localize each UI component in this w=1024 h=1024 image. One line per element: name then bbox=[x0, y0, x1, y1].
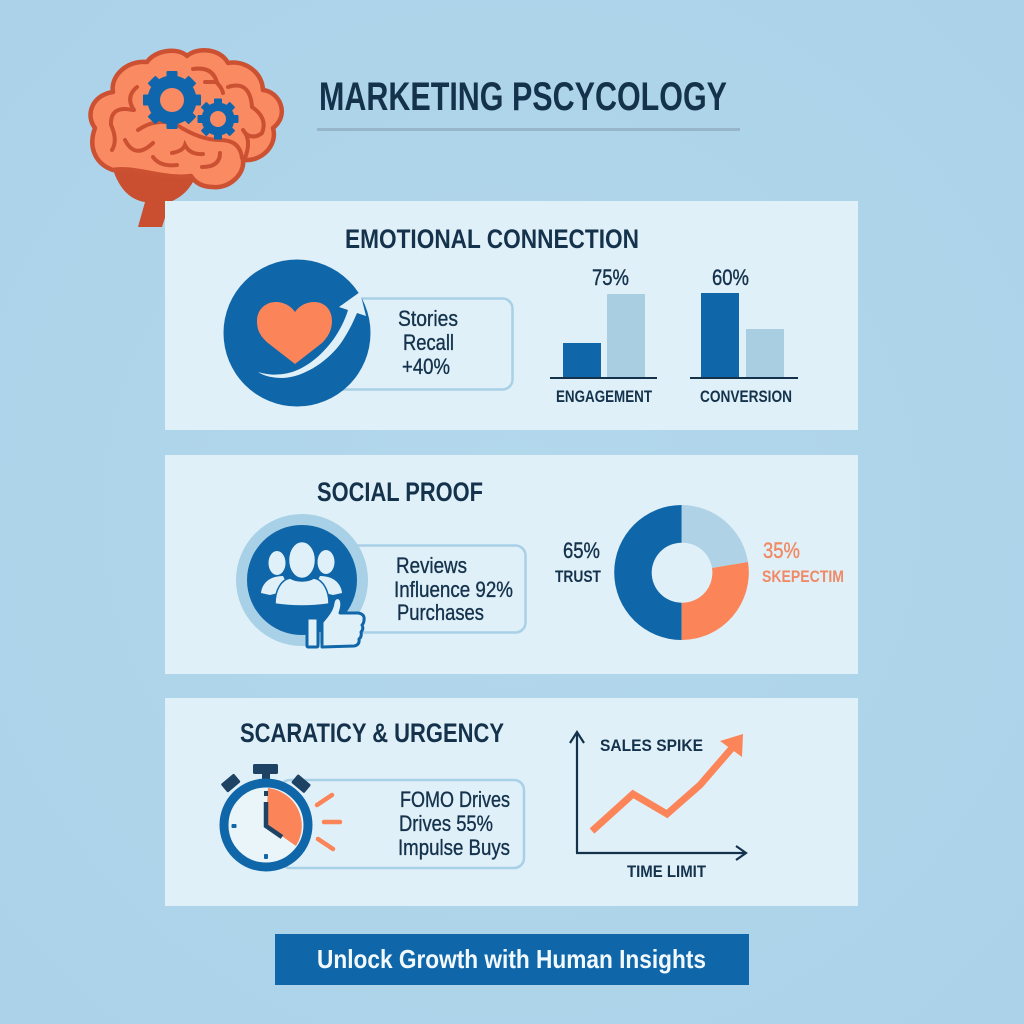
callout: reviews influence: Purchases bbox=[397, 600, 484, 625]
callout: stories recall: Stories bbox=[398, 306, 458, 331]
icon: brain with gears bbox=[91, 50, 282, 227]
callout: reviews influence: Influence 92% bbox=[394, 577, 513, 602]
title: MARKETING PSCYCOLOGY bbox=[319, 75, 727, 119]
callout: stories recall: Recall bbox=[403, 330, 454, 355]
panel: social proof bbox=[165, 455, 858, 674]
callout: fomo: Drives 55% bbox=[399, 811, 493, 836]
callout: fomo: Impulse Buys bbox=[398, 835, 510, 860]
icon: small gear bbox=[198, 98, 238, 140]
heading: social proof: SOCIAL PROOF bbox=[317, 477, 483, 507]
label: skepticism: 35% bbox=[763, 538, 800, 563]
title bbox=[317, 75, 740, 131]
bar chart: engagement: 75% bbox=[592, 265, 629, 290]
bar chart: engagement bbox=[550, 265, 657, 406]
line chart: sales spike bbox=[570, 732, 746, 881]
callout: reviews influence bbox=[320, 546, 526, 632]
call to action banner bbox=[275, 934, 749, 985]
heading: scarcity and urgency: SCARATICY & URGENCY bbox=[240, 718, 504, 748]
panel: emotional connection bbox=[165, 201, 858, 430]
line chart: sales spike: SALES SPIKE bbox=[600, 736, 703, 755]
label: trust: TRUST bbox=[555, 567, 601, 586]
icon: heart with rising arrow bbox=[224, 260, 370, 406]
callout: fomo: FOMO Drives bbox=[400, 787, 510, 812]
bar chart: conversion: 60% bbox=[712, 265, 749, 290]
bar chart: conversion: CONVERSION bbox=[700, 387, 792, 406]
callout: stories recall bbox=[300, 298, 512, 390]
icon: large gear bbox=[143, 71, 201, 129]
bar chart: engagement: ENGAGEMENT bbox=[556, 387, 652, 406]
icon: stopwatch bbox=[221, 764, 340, 867]
callout: reviews influence: Reviews bbox=[396, 553, 467, 578]
label: skepticism: SKEPECTIM bbox=[762, 567, 844, 586]
icon: people with thumbs up bbox=[236, 514, 368, 647]
donut chart: trust vs skepticism bbox=[614, 505, 749, 640]
panel: scarcity and urgency bbox=[165, 698, 858, 906]
label: trust bbox=[555, 538, 601, 586]
label: skepticism bbox=[762, 538, 844, 586]
label: trust: 65% bbox=[563, 538, 600, 563]
heading: emotional connection: EMOTIONAL CONNECTION bbox=[345, 224, 639, 254]
callout: fomo bbox=[280, 780, 524, 868]
callout: stories recall: +40% bbox=[402, 354, 450, 379]
bar chart: conversion bbox=[690, 265, 798, 406]
line chart: sales spike: TIME LIMIT bbox=[627, 862, 707, 881]
call to action banner: Unlock Growth with Human Insights bbox=[317, 944, 706, 974]
